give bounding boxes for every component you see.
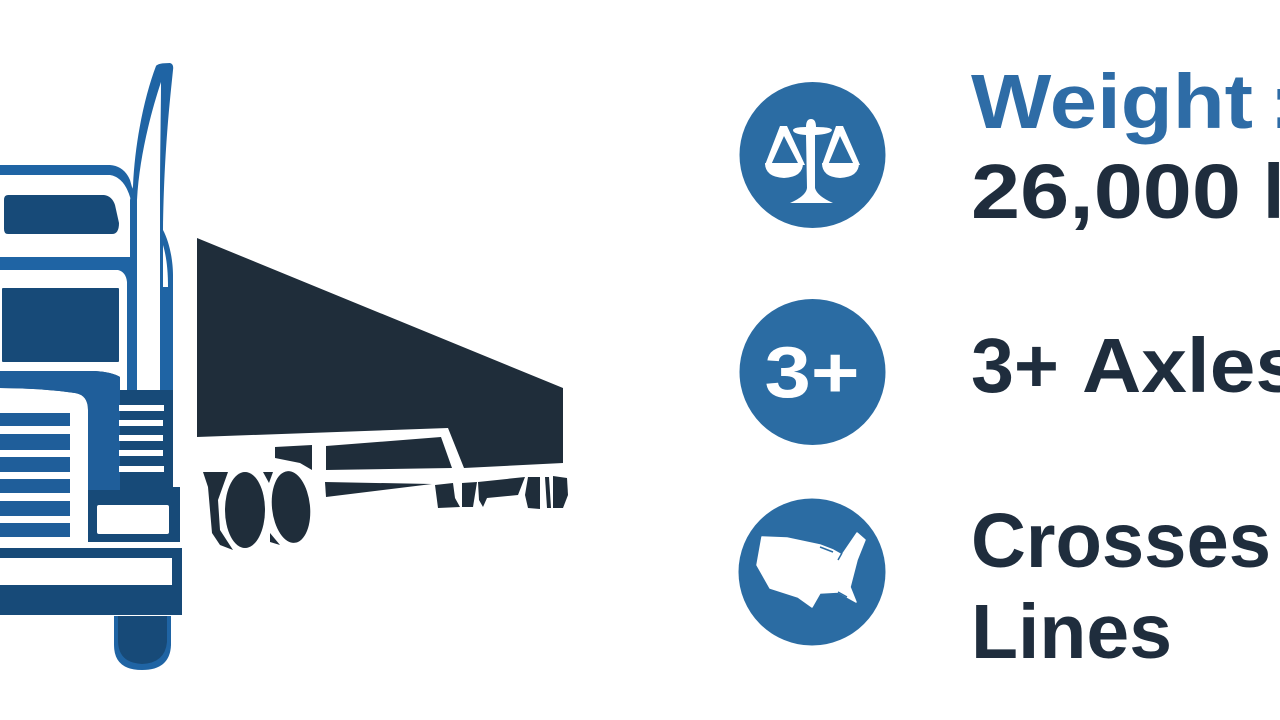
windshield xyxy=(2,288,119,362)
grille bars xyxy=(0,413,70,537)
text: crosses state lines: Lines xyxy=(971,589,1172,675)
scale post and beam xyxy=(790,119,833,203)
chassis panel xyxy=(326,437,452,470)
chassis bracket xyxy=(275,445,312,470)
left pan xyxy=(765,163,803,178)
trailer xyxy=(197,238,568,550)
upper cab window xyxy=(4,195,119,234)
side vents xyxy=(119,405,164,472)
icon: 3+ axles: 3+ xyxy=(764,333,860,413)
text: weight heading: Weight xyxy=(971,59,1253,145)
icon: scales of justice xyxy=(740,82,886,228)
text: weight value: 26,000 xyxy=(971,149,1241,235)
text: crosses state lines xyxy=(971,498,1271,675)
hood and radiator housing xyxy=(0,371,180,542)
text: crosses state lines: Crosses xyxy=(971,498,1271,584)
lower beam xyxy=(325,482,432,497)
text: axles xyxy=(971,323,1280,409)
text: axles: 3+ xyxy=(971,323,1059,409)
front wheel xyxy=(114,616,171,670)
cab roof and frame xyxy=(0,165,137,392)
icon: US map xyxy=(738,498,886,646)
trailer body xyxy=(197,238,563,468)
truck illustration xyxy=(0,63,182,670)
bumper xyxy=(0,548,182,615)
right pan xyxy=(822,163,859,178)
rear wheel group xyxy=(203,469,314,550)
headlight xyxy=(97,505,169,534)
icon: 3+ axles xyxy=(740,299,886,445)
exhaust stack xyxy=(130,63,173,392)
landing gear and axles xyxy=(435,476,568,509)
